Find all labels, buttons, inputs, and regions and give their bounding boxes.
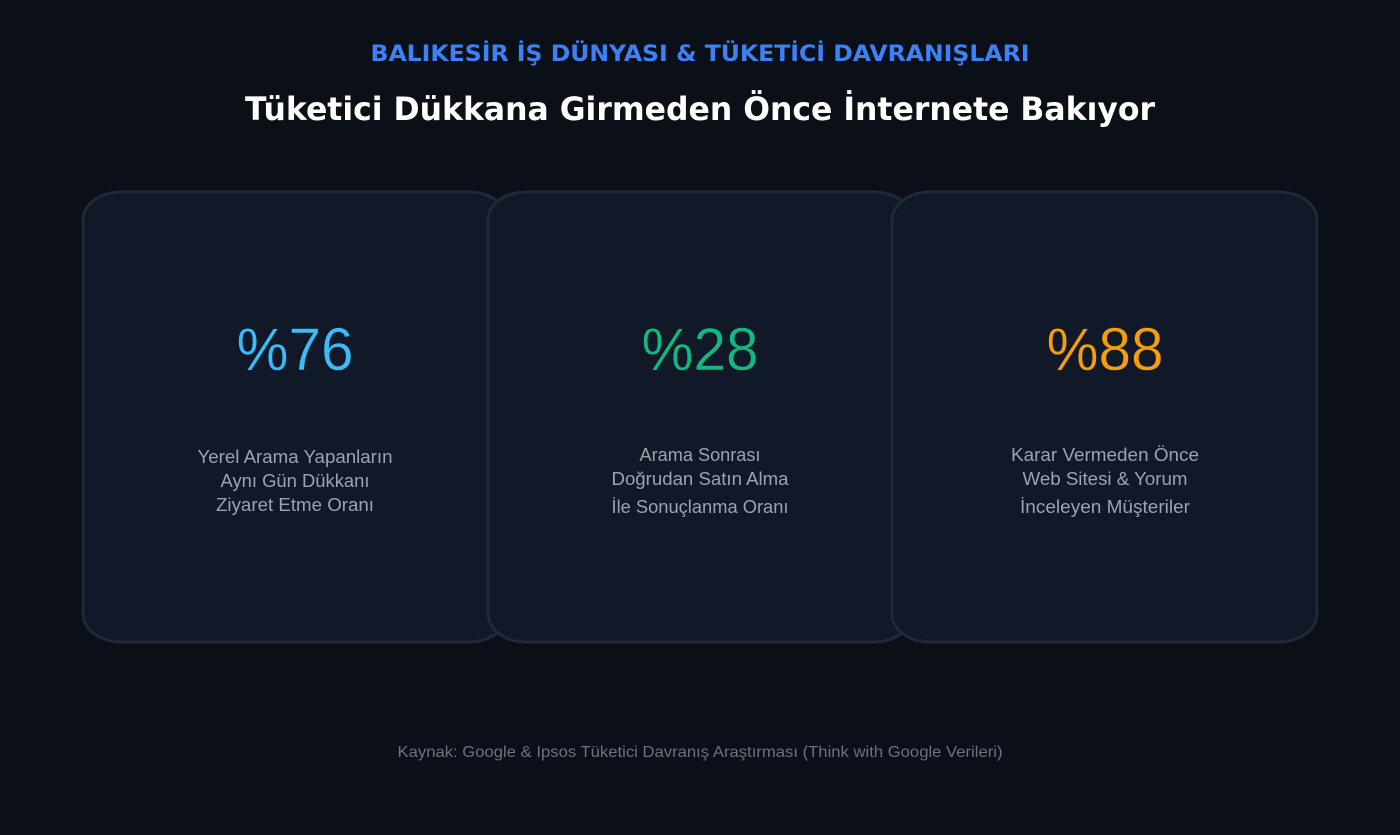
description: same-day visit — [198, 447, 392, 515]
description: same-day visit: Ziyaret Etme Oranı — [216, 495, 374, 515]
description: direct purchase: İle Sonuçlanma Oranı — [612, 497, 788, 517]
panel: direct purchase — [488, 192, 912, 642]
description: direct purchase: Arama Sonrası — [640, 445, 760, 465]
source note: Kaynak: Google & Ipsos Tüketici Davranış Araştırması (Think with Google Verileri) — [398, 744, 1002, 761]
description: same-day visit: Yerel Arama Yapanların — [198, 447, 392, 467]
panel: research before deciding — [892, 192, 1317, 642]
stat: 28 percent: %28 — [642, 316, 758, 383]
eyebrow heading: BALIKESİR İŞ DÜNYASI & TÜKETİCİ DAVRANIŞLARI — [370, 41, 1030, 67]
panel: same-day visit — [83, 192, 507, 642]
description: research before deciding — [1011, 445, 1199, 517]
title: Tüketici Dükkana Girmeden Önce İnternete Bakıyor — [245, 90, 1155, 128]
description: research before deciding: Web Sitesi & Yorum — [1022, 469, 1188, 489]
stat: 88 percent: %88 — [1046, 316, 1164, 383]
description: direct purchase — [612, 445, 790, 517]
description: research before deciding: Karar Vermeden Önce — [1011, 445, 1199, 465]
description: same-day visit: Aynı Gün Dükkanı — [220, 471, 370, 491]
stat: 76 percent: %76 — [236, 316, 354, 383]
description: direct purchase: Doğrudan Satın Alma — [612, 469, 790, 489]
description: research before deciding: İnceleyen Müşteriler — [1020, 497, 1190, 517]
